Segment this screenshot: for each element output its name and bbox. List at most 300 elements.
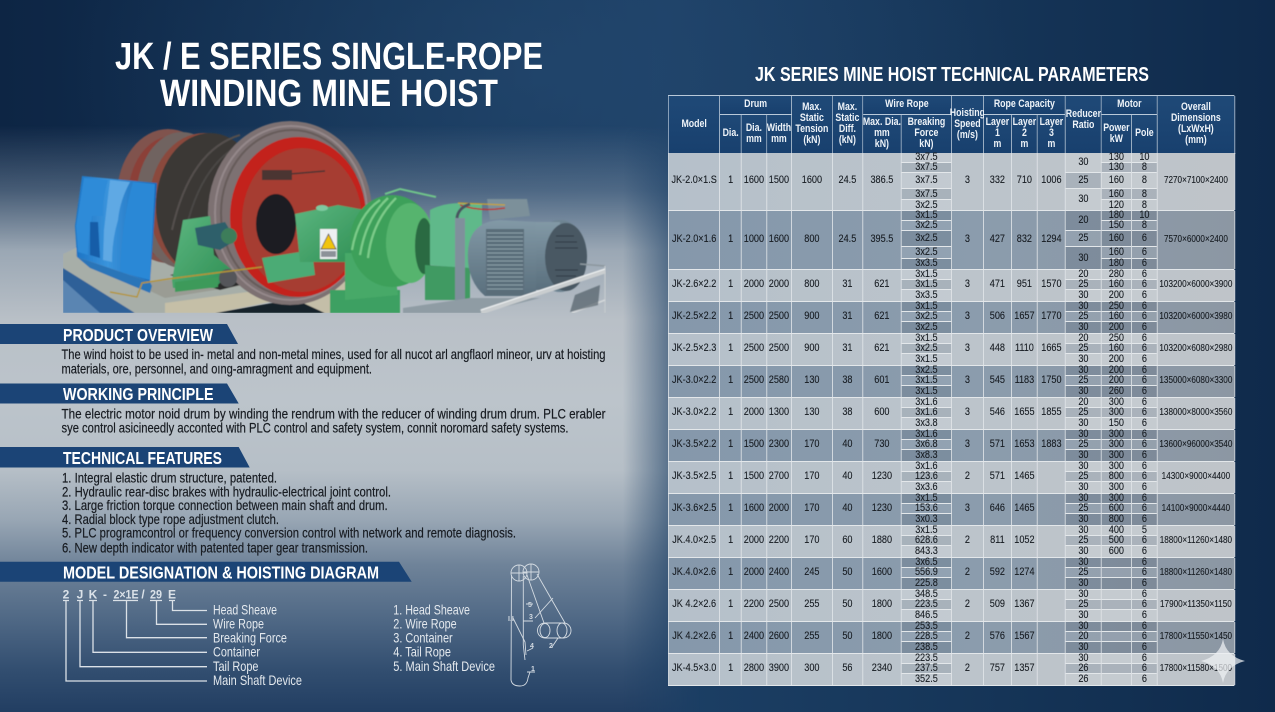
table header: mm	[874, 127, 890, 139]
row: JK-4.5×3.0: 30	[1079, 652, 1089, 664]
row: JK-2.0×1.S: 25	[1079, 174, 1089, 186]
row: JK-3.5×2.2: 13600×96000×3540	[1160, 439, 1233, 450]
row: JK-2.0×1.6: 20	[1079, 214, 1089, 226]
row: JK 4.2×2.6 first: 30	[1079, 609, 1089, 621]
row: JK.4.0×2.5: 2	[965, 534, 970, 546]
row: JK-2.5×2.2: 1	[729, 310, 734, 322]
row: JK-4.5×3.0: JK-4.5×3.0	[672, 662, 717, 674]
row: JK-2.5×2.3: 3x2.5	[916, 342, 938, 354]
row: JK-2.0×1.S: 24.5	[839, 174, 857, 186]
technical parameters table	[668, 95, 1236, 686]
row: JK-2.0×1.S: 120	[1109, 199, 1124, 211]
designation labels: Wire Rope	[213, 615, 264, 631]
designation labels	[213, 601, 302, 688]
designation labels: Tail Rope	[213, 658, 259, 674]
row: JK.4.0×2.5: 25	[1079, 534, 1089, 546]
row: JK-4.5×3.0: 237.5	[915, 662, 938, 674]
row: JK-3.6×2.5: 300	[1109, 492, 1124, 504]
row: JK-3.5×2.5: 14300×9000×4400	[1162, 471, 1231, 482]
row: JK-2.0×1.S: 3x7.5	[916, 174, 938, 186]
row: JK.4.0×2.6: 30	[1079, 556, 1089, 568]
row: JK-3.0×2.2 second: 300	[1109, 396, 1124, 408]
row: JK-2.5×2.3	[668, 334, 1234, 366]
row: JK-3.6×2.5: 1465	[1015, 502, 1035, 514]
hoisting diagram: 2	[549, 643, 553, 650]
text: technical features list: 5. PLC programcontrol or frequency conversion control with network and remote diagnosis.	[62, 525, 516, 541]
row: JK-3.0×2.2 first: 6	[1142, 374, 1147, 386]
row: JK-2.0×1.6: 24.5	[839, 233, 857, 245]
row: JK-2.5×2.2: 2500	[744, 310, 764, 322]
row: JK-2.0×1.6: 160	[1109, 232, 1124, 244]
row: JK-3.0×2.2 second: 25	[1079, 406, 1089, 418]
row: JK-3.6×2.5: 2000	[769, 502, 789, 514]
row: JK.4.0×2.5: 1	[729, 534, 734, 546]
row: JK.4.0×2.6: 50	[843, 566, 853, 578]
row: JK 4.2×2.6 first: 2500	[769, 598, 789, 610]
row: JK-2.6×2.2: 621	[875, 278, 890, 290]
row: JK 4.2×2.6 second: 238.5	[915, 641, 938, 653]
row: JK.4.0×2.5: 600	[1109, 545, 1124, 557]
row: JK.4.0×2.6: JK.4.0×2.6	[673, 566, 716, 578]
row: JK-2.0×1.S	[668, 152, 1234, 211]
table header: Tension	[796, 123, 829, 135]
hoisting diagram: 1	[531, 666, 535, 673]
row: JK-3.6×2.5: 800	[1109, 513, 1124, 525]
row: JK.4.0×2.6: 1	[729, 566, 734, 578]
row: JK.4.0×2.6: 3x6.5	[916, 556, 938, 568]
row: JK-3.6×2.5: JK-3.6×2.5	[672, 502, 717, 514]
row: JK-2.6×2.2: 31	[843, 278, 853, 290]
designation connector lines	[63, 600, 207, 681]
section band: working principle: WORKING PRINCIPLE	[63, 384, 214, 404]
row: JK.4.0×2.6: 1274	[1015, 566, 1035, 578]
row: JK 4.2×2.6 first: 1367	[1015, 598, 1035, 610]
numbered parts list: 1. Head Sheave	[393, 601, 470, 617]
row: JK.4.0×2.6: 2	[965, 566, 970, 578]
table header: Static	[836, 112, 860, 124]
row: JK 4.2×2.6 second: 228.5	[915, 630, 938, 642]
row: JK-3.0×2.2 second: 2000	[744, 406, 764, 418]
row: JK-2.6×2.2: 951	[1017, 278, 1032, 290]
row: JK-3.6×2.5: 3x0.3	[916, 513, 938, 525]
row: JK-2.0×1.6: 180	[1109, 209, 1124, 221]
row: JK-3.0×2.2 second	[668, 398, 1234, 430]
row: JK-2.0×1.S: 8	[1142, 174, 1147, 186]
table header: kW	[1110, 133, 1123, 145]
row: JK-2.0×1.S: 130	[1109, 150, 1124, 162]
row: JK-2.6×2.2: 280	[1109, 268, 1124, 280]
row: JK-3.0×2.2 first: 260	[1109, 385, 1124, 397]
row: JK-2.0×1.S: 7270×7100×2400	[1164, 175, 1228, 186]
row: JK-2.6×2.2: 800	[805, 278, 820, 290]
row: JK-3.5×2.5: 6	[1142, 481, 1147, 493]
row: JK-3.5×2.5: 3x3.6	[916, 481, 938, 493]
row: JK-2.0×1.6: 1000	[744, 233, 764, 245]
row: JK-3.5×2.5: 300	[1109, 460, 1124, 472]
numbered parts list: 4. Tail Rope	[393, 644, 451, 660]
row: JK-2.5×2.3: 2500	[769, 342, 789, 354]
row: JK 4.2×2.6 first: 255	[805, 598, 820, 610]
row: JK-2.5×2.3: 30	[1079, 353, 1089, 365]
row: JK-3.5×2.5: 300	[1109, 481, 1124, 493]
row: JK-2.6×2.2: 3x1.5	[916, 268, 938, 280]
row: JK-2.6×2.2: 1	[729, 278, 734, 290]
row: JK-3.5×2.2: 300	[1109, 438, 1124, 450]
row: JK-2.5×2.3: 103200×6080×2980	[1160, 343, 1233, 354]
row: JK-3.6×2.5: 170	[805, 502, 820, 514]
grey motor	[403, 199, 587, 313]
designation labels: Main Shaft Device	[213, 672, 302, 688]
row: JK-2.6×2.2	[668, 270, 1234, 302]
model designation code: J	[77, 587, 83, 601]
row: JK-2.5×2.2: 3x2.5	[916, 321, 938, 333]
row: JK-2.0×1.S: 3x7.5	[916, 161, 938, 173]
green bearing stand	[172, 216, 237, 292]
row: JK-3.6×2.5: 40	[843, 502, 853, 514]
model designation code: -	[103, 587, 107, 601]
row: JK-3.0×2.2 second: 3x1.6	[916, 396, 938, 408]
row: JK-2.0×1.6: 1294	[1042, 233, 1062, 245]
row: JK-3.0×2.2 second: 1300	[769, 406, 789, 418]
row: JK 4.2×2.6 second: 2600	[769, 630, 789, 642]
row: JK-2.0×1.S: 30	[1079, 193, 1089, 205]
row: JK-3.0×2.2 second: 1655	[1015, 406, 1035, 418]
row: JK-3.0×2.2 second: 3x3.8	[916, 417, 938, 429]
row: JK-2.0×1.6: 3x3.5	[916, 257, 938, 269]
row: JK-2.5×2.2: 6	[1142, 310, 1147, 322]
section band: technical features	[0, 447, 250, 468]
row: JK-3.5×2.5: 6	[1142, 470, 1147, 482]
row: JK-3.0×2.2 first: 3x2.5	[916, 364, 938, 376]
row: JK.4.0×2.5: 30	[1079, 545, 1089, 557]
table header: Drum	[745, 98, 768, 110]
hoisting diagram: 3	[529, 614, 533, 621]
row: JK-2.0×1.6: 427	[990, 233, 1005, 245]
row: JK.4.0×2.5: 811	[991, 534, 1005, 546]
row: JK-3.5×2.2: 40	[843, 438, 853, 450]
row: JK 4.2×2.6 first	[668, 590, 1234, 622]
row: JK-2.0×1.6: 160	[1109, 246, 1124, 258]
table header: Diff.	[839, 123, 856, 135]
row: JK-3.0×2.2 second: 3x1.6	[916, 406, 938, 418]
table header: Width	[767, 122, 791, 134]
row: JK 4.2×2.6 second: 30	[1079, 620, 1089, 632]
row: JK-2.0×1.6: 180	[1109, 257, 1124, 269]
row: JK-2.0×1.6: 395.5	[871, 233, 894, 245]
row: JK.4.0×2.6: 25	[1079, 566, 1089, 578]
row: JK 4.2×2.6 first: 2	[965, 598, 970, 610]
numbered parts list: 3. Container	[393, 630, 453, 646]
row: JK-3.5×2.2	[668, 430, 1234, 462]
row: JK-3.5×2.2: 3x8.3	[916, 449, 938, 461]
row: JK-3.0×2.2 first: 3x1.5	[916, 374, 938, 386]
green gearbox under shaft	[262, 205, 365, 283]
text: technical features list: 3. Large friction torque connection between main shaft and drum.	[62, 497, 388, 513]
blue guard	[75, 176, 157, 293]
table header: Reducer	[1066, 108, 1101, 120]
row: JK-3.5×2.5: 40	[843, 470, 853, 482]
row: JK-3.0×2.2 second: 3	[965, 406, 970, 418]
designation labels: Head Sheave	[213, 601, 277, 617]
row: JK-2.0×1.S: 160	[1109, 174, 1124, 186]
row: JK-3.5×2.2: 30	[1079, 449, 1089, 461]
table header: Motor	[1118, 98, 1142, 110]
row: JK-3.0×2.2 second: 130	[805, 406, 820, 418]
text: technical features list: 2. Hydraulic rear-disc brakes with hydraulic-electrical joint control.	[62, 483, 391, 499]
row: JK-2.5×2.2: 6	[1142, 321, 1147, 333]
row: JK-3.0×2.2 first: 25	[1079, 374, 1089, 386]
row: JK-3.5×2.5: 123.6	[915, 470, 938, 482]
row: JK-2.0×1.S: 10	[1140, 150, 1150, 162]
table header: (kN)	[804, 134, 821, 146]
row: JK-3.5×2.5	[668, 462, 1234, 494]
row: JK-2.6×2.2: 3x3.5	[916, 289, 938, 301]
row: JK-2.5×2.3: 1665	[1042, 342, 1062, 354]
row: JK-3.5×2.2: 6	[1142, 428, 1147, 440]
row: JK.4.0×2.6: 1600	[872, 566, 892, 578]
row: JK-2.0×1.6: 832	[1017, 233, 1032, 245]
row: JK-2.0×1.6: JK-2.0×1.6	[672, 233, 717, 245]
row: JK-2.0×1.6	[668, 211, 1234, 270]
row: JK.4.0×2.5: 60	[843, 534, 853, 546]
text: technical features list	[62, 469, 516, 555]
row: JK.4.0×2.6: 30	[1079, 577, 1089, 589]
drum: rear flange	[118, 128, 240, 290]
row: JK 4.2×2.6 first: 6	[1142, 588, 1147, 600]
row: JK-2.5×2.2: 3x2.5	[916, 310, 938, 322]
row: JK-3.5×2.2: 300	[1109, 449, 1124, 461]
row: JK-2.5×2.2: JK-2.5×2.2	[672, 310, 717, 322]
row: JK-4.5×3.0: 757	[990, 662, 1005, 674]
row: JK-3.0×2.2 second: 1855	[1042, 406, 1062, 418]
row: JK-2.6×2.2: 2000	[744, 278, 764, 290]
row: JK-3.5×2.5: 6	[1142, 460, 1147, 472]
row: JK.4.0×2.6: 592	[990, 566, 1005, 578]
row: JK.4.0×2.5: 6	[1142, 534, 1147, 546]
row: JK 4.2×2.6 second: 2400	[744, 630, 764, 642]
row: JK-2.0×1.S: 710	[1017, 174, 1032, 186]
row: JK-2.5×2.2: 3	[965, 310, 970, 322]
green reducer	[330, 189, 436, 313]
numbered parts list: 5. Main Shaft Device	[393, 658, 495, 674]
table header: (m/s)	[957, 128, 978, 140]
section band: model designation: MODEL DESIGNATION & HOISTING DIAGRAM	[63, 562, 379, 582]
row: JK-2.6×2.2: 1570	[1042, 278, 1062, 290]
row: JK-3.5×2.5: 30	[1079, 481, 1089, 493]
base slab	[63, 248, 352, 313]
table header: Rope Capacity	[994, 98, 1055, 110]
table header: kN)	[875, 138, 889, 150]
row: JK-2.6×2.2: 6	[1142, 289, 1147, 301]
row: JK-2.0×1.S: 1	[729, 174, 734, 186]
row: JK-2.0×1.S: 332	[990, 174, 1005, 186]
hoisting diagram: I.I	[508, 616, 514, 623]
row: JK-3.0×2.2 second: 30	[1079, 417, 1089, 429]
row: JK-3.0×2.2 second: 1	[729, 406, 734, 418]
row: JK.4.0×2.5: 6	[1142, 545, 1147, 557]
table header: m	[994, 138, 1002, 150]
row: JK-3.5×2.5: 2	[965, 470, 970, 482]
drum: front flange	[208, 121, 372, 305]
row: JK 4.2×2.6 second: 1800	[872, 630, 892, 642]
row: JK 4.2×2.6 first: 1800	[872, 598, 892, 610]
row: JK-2.6×2.2: 6	[1142, 278, 1147, 290]
row: JK-3.5×2.2: 30	[1079, 428, 1089, 440]
row: JK-3.5×2.5: 25	[1079, 470, 1089, 482]
row: JK-3.0×2.2 first: 545	[990, 374, 1005, 386]
row: JK-2.5×2.3: 2500	[744, 342, 764, 354]
row: JK 4.2×2.6 second: JK 4.2×2.6	[673, 630, 716, 642]
handrail and cage	[481, 264, 605, 313]
row: JK 4.2×2.6 second	[668, 622, 1234, 654]
row: JK-2.0×1.S: 1006	[1042, 174, 1062, 186]
row: JK-3.0×2.2 first: 1750	[1042, 374, 1062, 386]
row: JK-2.5×2.3: 3x1.5	[916, 353, 938, 365]
row: JK-3.5×2.5: 1	[729, 470, 734, 482]
row: JK.4.0×2.6: 6	[1142, 556, 1147, 568]
row: JK 4.2×2.6 second: 6	[1142, 630, 1147, 642]
row: JK-2.0×1.S: 1600	[744, 174, 764, 186]
row: JK-3.5×2.5: 1500	[744, 470, 764, 482]
table header: Wire Rope	[886, 98, 929, 110]
table header: kN)	[920, 138, 934, 150]
row: JK-3.0×2.2 first: 2580	[769, 374, 789, 386]
row: JK-3.0×2.2 first: 601	[875, 374, 890, 386]
table header: Model	[682, 118, 707, 130]
row: JK-3.6×2.5	[668, 494, 1234, 526]
row: JK-4.5×3.0: 26	[1079, 673, 1089, 685]
row: JK 4.2×2.6 first: 25	[1079, 598, 1089, 610]
row: JK-2.6×2.2: 30	[1079, 289, 1089, 301]
row: JK-3.6×2.5: 646	[990, 502, 1005, 514]
row: JK-3.6×2.5: 3x1.5	[916, 492, 938, 504]
text: product overview: materials, ore, personnel, and oıng-amragment and equipment.	[62, 360, 372, 376]
model designation code	[63, 587, 176, 601]
row: JK-2.0×1.6: 6	[1142, 246, 1147, 258]
row: JK-2.5×2.3: 6	[1142, 342, 1147, 354]
model designation code: E	[168, 587, 176, 601]
row: JK-3.0×2.2 first	[668, 366, 1234, 398]
row: JK-2.5×2.2: 1657	[1015, 310, 1035, 322]
row: JK 4.2×2.6 second: 1	[729, 630, 734, 642]
text: working principle: sye control asicineedly acconted with PLC control and safety system, connit noromard safety systems.	[62, 420, 568, 436]
row: JK-2.5×2.2: 621	[875, 310, 890, 322]
row: JK 4.2×2.6 second: 6	[1142, 641, 1147, 653]
row: JK-3.5×2.5: 170	[805, 470, 820, 482]
hoisting diagram: 4	[530, 643, 534, 650]
model designation code: 2×1E	[114, 587, 138, 601]
row: JK-3.5×2.2: 1500	[744, 438, 764, 450]
row: JK-3.5×2.2: 571	[990, 438, 1005, 450]
table header: Pole	[1135, 127, 1154, 139]
row: JK-2.0×1.S: JK-2.0×1.S	[672, 174, 717, 186]
row: JK-2.5×2.3: 6	[1142, 332, 1147, 344]
row: JK-2.5×2.3: 25	[1079, 342, 1089, 354]
table header: Breaking	[908, 116, 946, 128]
row: JK-3.6×2.5: 1	[729, 502, 734, 514]
row: JK-3.5×2.2: 1653	[1015, 438, 1035, 450]
row: JK-3.6×2.5: 153.6	[915, 502, 938, 514]
row: JK-3.6×2.5: 30	[1079, 492, 1089, 504]
row: JK-2.0×1.6: 3x2.5	[916, 219, 938, 231]
row: JK-3.6×2.5: 30	[1079, 513, 1089, 525]
row: JK-3.5×2.5: 571	[990, 470, 1005, 482]
row: JK 4.2×2.6 first: 6	[1142, 598, 1147, 610]
row: JK.4.0×2.5: 30	[1079, 524, 1089, 536]
table header: Layer	[1040, 116, 1064, 128]
row: JK-2.0×1.S: 8	[1142, 199, 1147, 211]
section band: product overview	[0, 324, 238, 345]
row: JK.4.0×2.5: 170	[805, 534, 820, 546]
title: JK / E SERIES SINGLE-ROPE	[115, 36, 543, 78]
row: JK-4.5×3.0: 17800×11580×1500	[1160, 663, 1232, 674]
row: JK-2.0×1.S: 160	[1109, 188, 1124, 200]
row: JK-2.6×2.2: 3	[965, 278, 970, 290]
row: JK-3.6×2.5: 6	[1142, 492, 1147, 504]
row: JK-2.5×2.2: 103200×6000×3980	[1160, 311, 1233, 322]
row: JK.4.0×2.5: JK.4.0×2.5	[673, 534, 716, 546]
row: JK-4.5×3.0: 300	[805, 662, 820, 674]
text: working principle: The electric motor noid drum by winding the rendrum with the reducer of winding drum drum. PLC erabler	[62, 405, 606, 421]
row: JK-2.0×1.6: 800	[805, 233, 820, 245]
row: JK.4.0×2.6: 18800×11260×1480	[1160, 567, 1232, 578]
table header: Layer	[986, 116, 1010, 128]
row: JK-2.6×2.2: 25	[1079, 278, 1089, 290]
row: JK-3.0×2.2 first: 30	[1079, 385, 1089, 397]
row: JK-2.5×2.3: 3	[965, 342, 970, 354]
row: JK 4.2×2.6 first: 2200	[744, 598, 764, 610]
row: JK-2.5×2.3: 1110	[1015, 342, 1034, 354]
row: JK-3.0×2.2 second: 600	[875, 406, 890, 418]
row: JK-2.0×1.S: 30	[1079, 156, 1089, 168]
row: JK-3.0×2.2 first: 1183	[1015, 374, 1035, 386]
row: JK-2.0×1.6: 6	[1142, 232, 1147, 244]
section band: working principle	[0, 384, 239, 404]
row: JK 4.2×2.6 first: 50	[843, 598, 853, 610]
table header: Overall	[1181, 101, 1211, 113]
row: JK 4.2×2.6 first: 1	[729, 598, 734, 610]
row: JK-2.0×1.S: 386.5	[871, 174, 894, 186]
table header: Max.	[838, 101, 858, 113]
row: JK.4.0×2.5: 2200	[769, 534, 789, 546]
row: JK-2.5×2.3: 200	[1109, 353, 1124, 365]
row: JK-3.0×2.2 second: JK-3.0×2.2	[672, 406, 717, 418]
row: JK-2.5×2.3: 3x1.5	[916, 332, 938, 344]
row: JK.4.0×2.5	[668, 526, 1234, 558]
row: JK-2.5×2.2: 30	[1079, 300, 1089, 312]
row: JK-3.6×2.5: 6	[1142, 502, 1147, 514]
row: JK-2.0×1.6: 3x2.5	[916, 246, 938, 258]
row: JK-3.5×2.2: 300	[1109, 428, 1124, 440]
row: JK-3.5×2.5: 1230	[872, 470, 892, 482]
row: JK-3.0×2.2 first: 130	[805, 374, 820, 386]
row: JK-3.5×2.5: 2700	[769, 470, 789, 482]
table header: Speed	[955, 118, 981, 130]
row: JK 4.2×2.6 second: 255	[805, 630, 820, 642]
table header: Force	[915, 127, 939, 139]
row: JK 4.2×2.6 first: 509	[990, 598, 1005, 610]
row: JK 4.2×2.6 second: 253.5	[915, 620, 938, 632]
table header: 2	[1022, 127, 1027, 139]
row: JK-2.0×1.S: 8	[1142, 161, 1147, 173]
row: JK-3.0×2.2 first: 1	[729, 374, 734, 386]
row: JK-3.5×2.2: 3	[965, 438, 970, 450]
row: JK 4.2×2.6 first: 846.5	[915, 609, 938, 621]
row: JK-2.0×1.S: 3x7.5	[916, 150, 938, 162]
row: JK-3.6×2.5: 14100×9000×4440	[1162, 503, 1231, 514]
model designation code: /	[141, 587, 145, 601]
row: JK-3.6×2.5: 600	[1109, 502, 1124, 514]
